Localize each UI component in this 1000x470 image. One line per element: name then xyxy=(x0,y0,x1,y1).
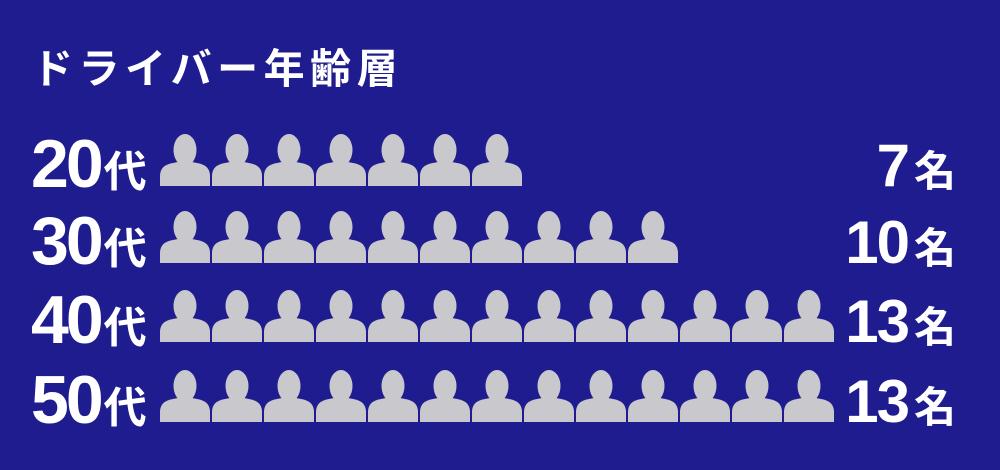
row: 20代 xyxy=(31,126,956,202)
title: ドライバー年齢層 xyxy=(32,46,403,92)
row: 50代 xyxy=(31,362,956,438)
row: 50代: 13名 xyxy=(845,368,956,435)
row: 50代: 50代 xyxy=(31,362,147,438)
row: 40代: 40代 xyxy=(31,282,147,358)
row: 40代: 13名 xyxy=(845,288,956,355)
row: 30代: 10名 xyxy=(845,209,956,276)
row: 20代: 7名 xyxy=(877,132,956,199)
row: 30代 xyxy=(31,203,956,279)
row: 20代: 20代 xyxy=(31,126,147,202)
row: 30代: 30代 xyxy=(31,203,147,279)
row: 40代 xyxy=(31,282,956,358)
